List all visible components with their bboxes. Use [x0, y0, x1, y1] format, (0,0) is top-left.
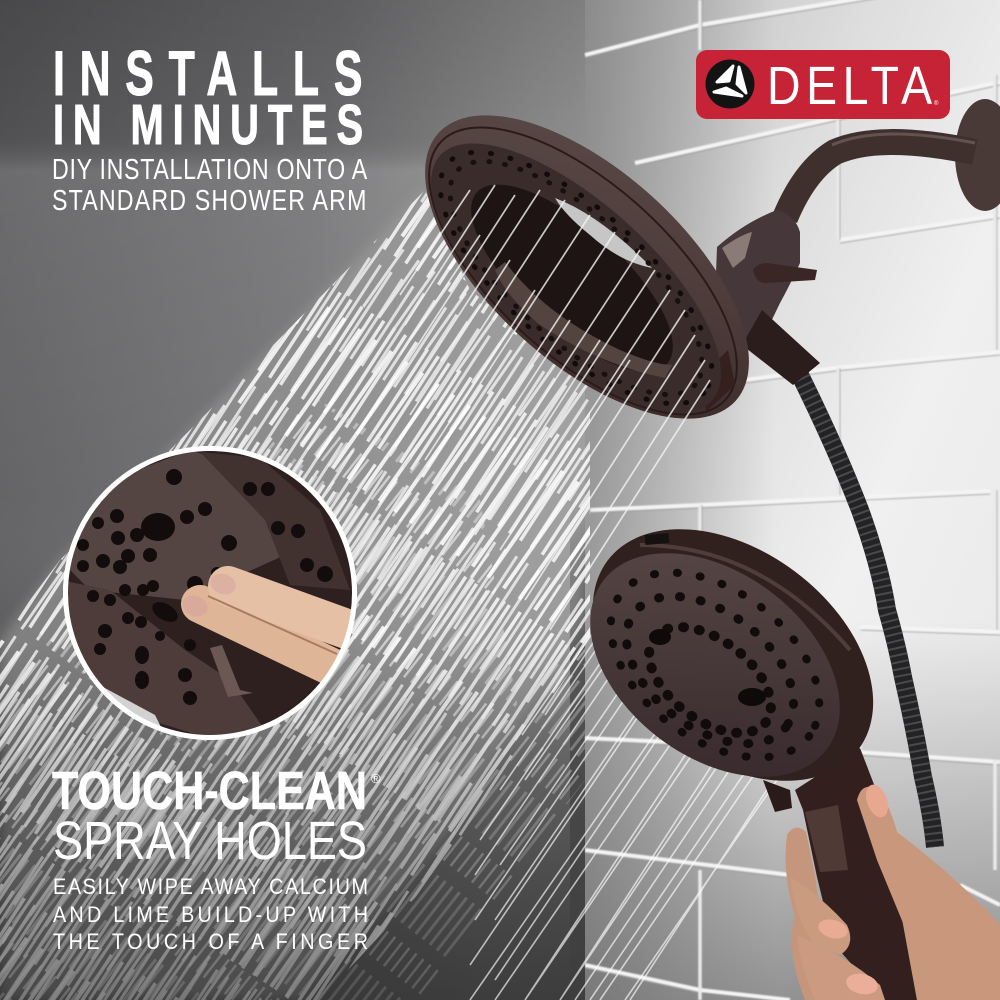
text: easily wipe away: THE TOUCH OF A FINGER	[53, 930, 368, 954]
hand shower head	[590, 529, 917, 1000]
left grey wall background	[0, 0, 585, 1000]
water spray from hand shower	[470, 590, 815, 1000]
heading: touch-clean spray holes	[52, 761, 381, 871]
text: easily wipe away: EASILY WIPE AWAY CALCIUM	[53, 875, 368, 899]
heading: touch-clean spray holes: SPRAY HOLES	[53, 811, 367, 871]
text: DIY installation: STANDARD SHOWER ARM	[52, 183, 366, 217]
text: easily wipe away: AND LIME BUILD-UP WITH	[53, 903, 368, 927]
Delta logo badge	[696, 50, 950, 119]
heading: installs in minutes: IN MINUTES	[53, 93, 363, 157]
heading: installs in minutes: INSTALLS	[53, 39, 362, 109]
icon: Delta triangle mark	[706, 60, 754, 108]
Delta logo badge: ®	[934, 100, 939, 107]
rain shower head	[374, 62, 800, 472]
white subway tile wall	[570, 0, 1000, 1000]
flexible hose	[795, 365, 935, 847]
heading: touch-clean spray holes: ®	[371, 771, 381, 786]
hand fingers behind handle	[786, 828, 830, 1000]
water spray from rain shower head	[0, 190, 590, 1000]
shower arm and wall flange	[785, 99, 1000, 218]
hand gripping handle	[790, 782, 1000, 1000]
text: easily wipe away	[53, 875, 368, 954]
text: DIY installation: DIY INSTALLATION ONTO A	[52, 152, 368, 186]
callout: touch-clean close-up circle	[60, 440, 360, 750]
diverter connector body and knob	[715, 210, 820, 385]
text: DIY installation	[52, 152, 368, 217]
fingers touching spray holes	[179, 570, 355, 671]
heading: installs in minutes	[53, 39, 363, 157]
Delta logo badge: DELTA	[767, 55, 932, 116]
thin water jets over shower head	[400, 185, 710, 630]
heading: touch-clean spray holes: TOUCH-CLEAN	[52, 761, 367, 821]
